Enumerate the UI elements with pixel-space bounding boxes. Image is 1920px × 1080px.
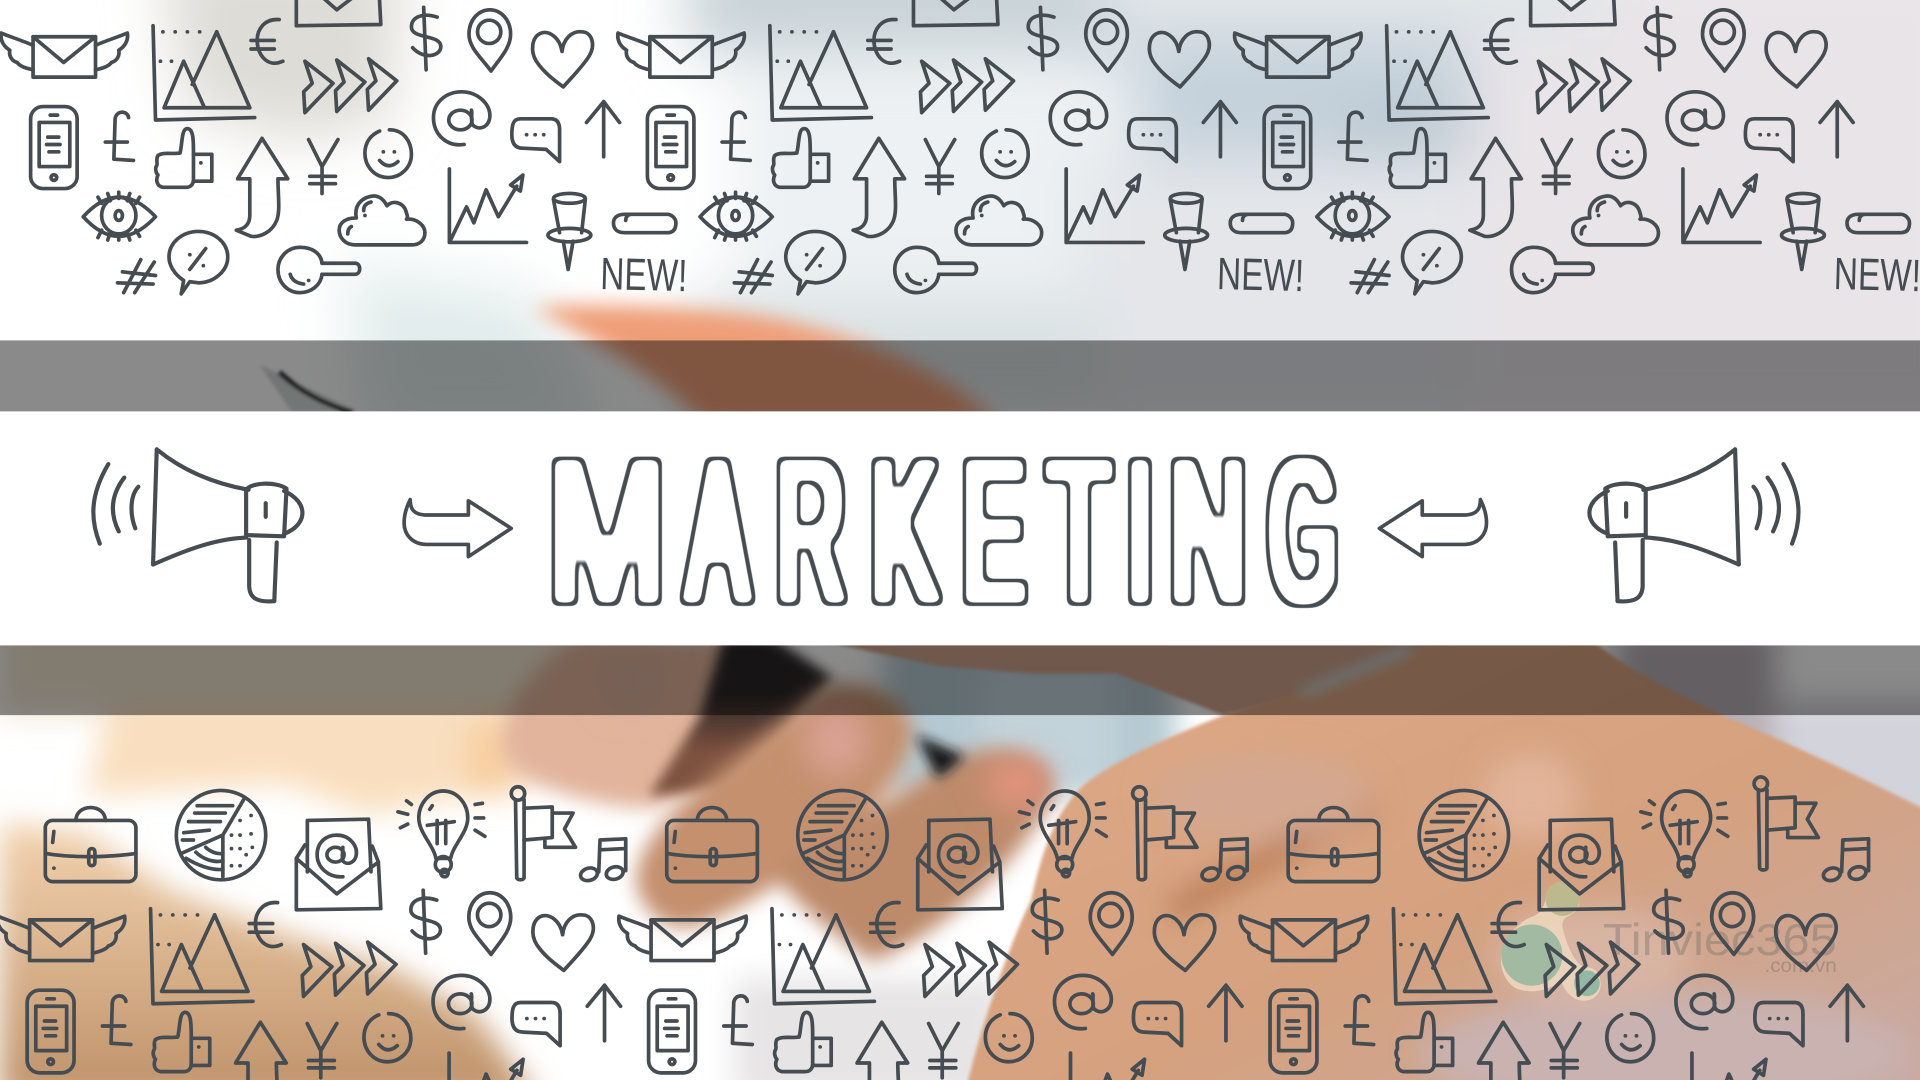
icon: music notes — [579, 839, 626, 882]
icon: flag — [1133, 787, 1197, 880]
icon: thumbs up — [153, 1012, 210, 1072]
icon: up arrow — [587, 102, 620, 157]
icon: hash — [734, 260, 772, 293]
icon: smile — [1598, 130, 1645, 178]
icon: at envelope — [1539, 819, 1624, 910]
icon: cloud — [956, 196, 1042, 245]
icon: eye — [700, 192, 772, 240]
icon: smile — [365, 130, 411, 178]
watermark domain: .com.vn — [1764, 955, 1837, 977]
icon: growth chart — [449, 169, 527, 242]
title: MARKETING: A — [687, 420, 748, 643]
icon: speech bubble — [1133, 1003, 1182, 1046]
icon: hash — [1351, 260, 1389, 293]
icon: yen — [925, 140, 955, 193]
icon: euro — [249, 903, 281, 947]
icon: magnifier — [278, 247, 360, 293]
title: MARKETING: E — [962, 420, 1025, 643]
icon: curved up arrow — [1470, 138, 1521, 237]
icon: pound — [724, 996, 752, 1044]
icon: light bulb — [1019, 791, 1106, 877]
icon: paperclip — [613, 214, 676, 233]
icon: heart — [533, 32, 593, 87]
icon: pie chart — [176, 790, 266, 880]
icon: pound — [1339, 112, 1367, 160]
icon: thumbs up — [1396, 1012, 1453, 1072]
icon: heart — [1154, 915, 1215, 970]
icon: dollar — [1645, 7, 1674, 70]
icon: pie chart — [798, 790, 887, 880]
icon pattern: top tile 3 — [1235, 7, 1920, 301]
icon: map pin — [1712, 893, 1754, 954]
icon: chevrons — [1537, 59, 1630, 113]
icon: mountain chart — [1393, 909, 1496, 1004]
icon: speech bubble — [1129, 119, 1176, 162]
icon: dollar — [411, 890, 440, 953]
icon: at envelope — [918, 819, 1002, 910]
icon: at envelope — [296, 819, 381, 910]
icon pattern: bottom tile 1 — [0, 890, 621, 1080]
icon: thumbs up — [1389, 129, 1445, 187]
icon: yen — [307, 1023, 337, 1078]
icon: phone — [1264, 107, 1311, 189]
icon pattern: top tile 1 — [1, 7, 688, 301]
icon: eye — [83, 192, 156, 240]
icon: dollar — [1654, 890, 1683, 953]
label: NEW!: NEW! — [600, 248, 688, 301]
icon: euro — [871, 903, 903, 947]
icon: up arrow — [1203, 102, 1236, 157]
icon: yen — [929, 1023, 958, 1078]
icon: map pin — [1090, 893, 1132, 954]
white central banner — [0, 411, 1920, 645]
title: MARKETING: K — [871, 420, 937, 643]
icon: eye — [1317, 192, 1389, 240]
icon: winged envelope — [1240, 916, 1368, 961]
icon: map pin — [1086, 10, 1127, 71]
icon: at sign — [433, 92, 490, 145]
icon: growth chart — [1683, 169, 1760, 242]
icon: smile — [1607, 1014, 1654, 1062]
icon: right megaphone — [1589, 449, 1798, 601]
icon: flag — [1754, 777, 1818, 870]
icon: map pin — [1703, 10, 1744, 71]
icon: euro — [1492, 903, 1524, 947]
text: G — [1269, 420, 1337, 643]
icon: heart — [1776, 915, 1836, 970]
icon: mountain chart — [153, 26, 255, 120]
icon: at sign — [433, 975, 490, 1029]
icon: thumbs up — [772, 129, 829, 187]
icon: winged envelope — [619, 916, 746, 961]
icon: at envelope — [296, 0, 381, 26]
icon: left megaphone — [93, 449, 302, 601]
title: MARKETING: T — [1048, 420, 1111, 643]
photo background: lower blurred hand scene — [0, 612, 1920, 1080]
title: MARKETING — [547, 420, 1337, 643]
title: MARKETING: R — [776, 420, 845, 643]
photo background: upper blurred tablet scene — [144, 0, 1920, 412]
icon: yen — [309, 140, 338, 193]
icon: phone — [27, 990, 74, 1073]
title: MARKETING: I — [1127, 420, 1153, 643]
icon: euro — [251, 19, 283, 63]
icon pattern: briefcase row, tile 3 — [1288, 777, 1869, 910]
arrow: pointing right to title — [404, 500, 511, 557]
dark translucent band: bottom — [0, 645, 1920, 715]
icon: up arrow — [1820, 102, 1853, 157]
icon: growth chart — [1071, 1053, 1148, 1080]
icon: chevrons — [304, 59, 397, 113]
icon: smile — [364, 1014, 411, 1062]
icon: smile — [985, 1014, 1032, 1062]
icon: dollar — [411, 7, 441, 70]
icon pattern: bottom tile 3 — [1240, 890, 1863, 1080]
arrow: pointing left to title — [1379, 500, 1487, 557]
icon: curved up arrow — [1477, 1022, 1529, 1080]
icon: up arrow — [1209, 985, 1242, 1041]
icon: light bulb — [398, 791, 485, 877]
icon: mountain chart — [770, 26, 871, 120]
icon: chevrons — [302, 942, 396, 996]
icon: phone — [1270, 990, 1317, 1073]
icon: pound — [102, 996, 131, 1044]
icon: chevrons — [924, 942, 1017, 996]
icon: curved up arrow — [234, 1022, 286, 1080]
icon: at envelope — [1531, 0, 1615, 26]
icon: pound — [1345, 996, 1374, 1044]
icon: curved up arrow — [853, 138, 905, 237]
icon: hash — [118, 260, 156, 293]
icon: curved up arrow — [856, 1022, 908, 1080]
icon: at envelope — [913, 0, 998, 26]
icon: phone — [31, 107, 77, 189]
icon: paperclip — [1230, 214, 1293, 233]
icon: map pin — [469, 10, 511, 71]
icon: up arrow — [587, 985, 621, 1041]
icon: light bulb — [1641, 791, 1728, 877]
icon: thumbtack — [1165, 193, 1208, 269]
icon: at sign — [1676, 975, 1733, 1029]
icon: euro — [868, 19, 900, 63]
icon: mountain chart — [151, 909, 253, 1004]
icon: pie chart — [1419, 790, 1509, 880]
icon pattern: bottom tile 2 — [619, 890, 1242, 1080]
icon: percent bubble — [786, 231, 845, 294]
icon: briefcase — [1288, 808, 1379, 882]
icon: cloud — [339, 196, 425, 245]
icon: pound — [722, 112, 750, 160]
icon: up arrow — [1830, 985, 1863, 1041]
icon: percent bubble — [169, 231, 228, 294]
icon: growth chart — [1066, 169, 1143, 242]
title: MARKETING: N — [1169, 420, 1247, 643]
icon pattern: top bleed row — [176, 0, 1810, 26]
icon: at sign — [1050, 92, 1107, 145]
dark translucent band: top — [0, 340, 1920, 411]
icon: mountain chart — [1387, 26, 1488, 120]
icon pattern: top tile 2 — [618, 7, 1305, 301]
icon: cloud — [1573, 196, 1658, 245]
icon: curved up arrow — [236, 138, 288, 237]
icon: magnifier — [1512, 247, 1593, 293]
icon: music notes — [1201, 839, 1247, 882]
watermark: Tinviec365 logo — [1501, 882, 1837, 1001]
icon: magnifier — [895, 247, 976, 293]
icon: thumbs up — [156, 129, 212, 187]
icon: heart — [1149, 32, 1209, 87]
icon: at sign — [1054, 975, 1111, 1029]
icon: dollar — [1032, 890, 1062, 953]
label: NEW!: NEW! — [1217, 248, 1305, 301]
icon: speech bubble — [512, 119, 560, 162]
icon: thumbs up — [775, 1012, 831, 1072]
icon: yen — [1550, 1023, 1580, 1078]
icon: pound — [105, 112, 133, 160]
icon: smile — [982, 130, 1028, 178]
icon: heart — [533, 915, 593, 970]
icon: winged envelope — [0, 916, 125, 961]
icon: paperclip — [1847, 214, 1909, 233]
icon: heart — [1766, 32, 1826, 87]
icon: chevrons — [920, 59, 1014, 113]
icon: speech bubble — [1745, 119, 1793, 162]
icon: chevrons — [1545, 942, 1639, 996]
icon: percent bubble — [1403, 231, 1461, 294]
icon: euro — [1485, 19, 1516, 63]
icon: mountain chart — [772, 909, 874, 1004]
icon: at sign — [1667, 92, 1723, 145]
icon: music notes — [1822, 839, 1869, 882]
icon: thumbtack — [1782, 193, 1824, 269]
watermark text: Tinviec365 — [1603, 916, 1837, 965]
icon: yen — [1542, 140, 1572, 193]
icon: map pin — [469, 893, 511, 954]
icon: winged envelope — [618, 33, 744, 77]
icon: winged envelope — [1, 33, 128, 77]
icon: flag — [511, 787, 576, 880]
icon pattern: briefcase row, tile 2 — [667, 787, 1247, 910]
icon: winged envelope — [1235, 33, 1361, 77]
icon: speech bubble — [512, 1003, 560, 1046]
icon: growth chart — [1692, 1053, 1770, 1080]
icon: briefcase — [667, 808, 757, 882]
icon: growth chart — [449, 1053, 527, 1080]
icon: briefcase — [45, 808, 136, 882]
icon: dollar — [1028, 7, 1058, 70]
title: MARKETING: M — [547, 420, 666, 643]
icon: phone — [647, 107, 694, 189]
icon: speech bubble — [1755, 1003, 1803, 1046]
icon: thumbtack — [548, 193, 591, 269]
icon pattern: briefcase row, tile 1 — [45, 787, 626, 910]
icon: phone — [649, 990, 695, 1073]
